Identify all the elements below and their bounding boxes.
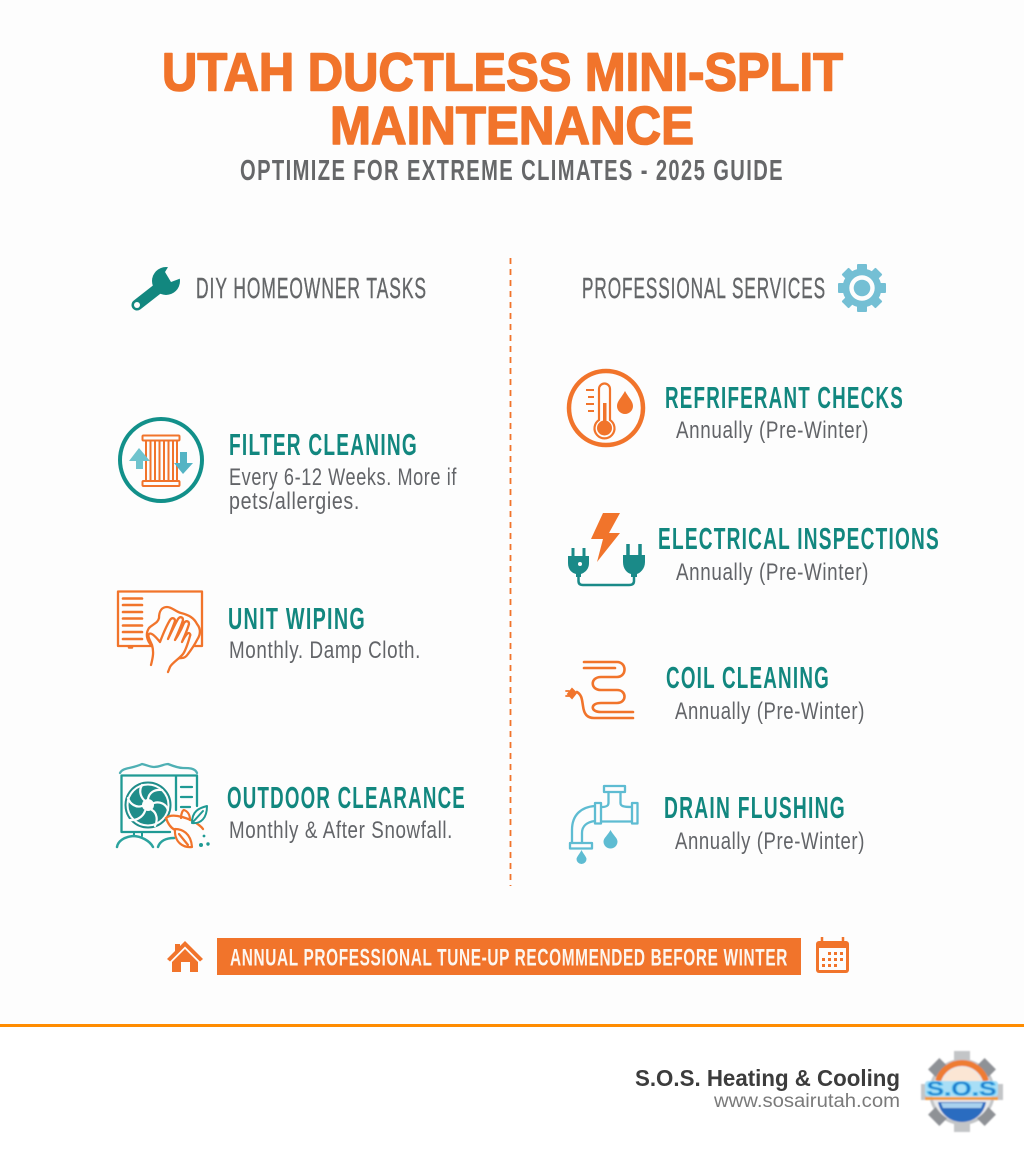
company name: S.O.S. Heating & Cooling bbox=[635, 1065, 900, 1091]
column divider bbox=[510, 258, 512, 886]
label: coil cleaning: COIL CLEANING bbox=[666, 660, 830, 695]
label: unit wiping: UNIT WIPING bbox=[228, 601, 366, 636]
header bbox=[162, 42, 843, 187]
description: refrigerant checks: Annually (Pre-Winter) bbox=[676, 417, 869, 444]
service: electrical inspections bbox=[568, 513, 940, 586]
description: filter cleaning: Every 6-12 Weeks. More if bbox=[229, 464, 457, 491]
icon: pipe and drops bbox=[570, 786, 638, 864]
title: MAINTENANCE bbox=[330, 96, 694, 156]
icon: thermometer and drop bbox=[569, 371, 643, 445]
service: drain flushing bbox=[570, 786, 865, 864]
description: outdoor clearance: Monthly & After Snowfall. bbox=[229, 817, 453, 844]
task: filter cleaning bbox=[120, 419, 457, 515]
panel: DIY homeowner tasks bbox=[117, 259, 466, 847]
description: coil cleaning: Annually (Pre-Winter) bbox=[675, 698, 865, 725]
label: filter cleaning: FILTER CLEANING bbox=[229, 427, 418, 462]
description: unit wiping: Monthly. Damp Cloth. bbox=[229, 637, 421, 664]
icon: outdoor unit with leaves bbox=[117, 764, 210, 847]
label: drain flushing: DRAIN FLUSHING bbox=[664, 790, 846, 825]
task: outdoor clearance bbox=[117, 764, 466, 847]
heading: professional services: PROFESSIONAL SERVICES bbox=[582, 273, 826, 305]
icon: heating coil bbox=[566, 662, 633, 718]
callout: annual tune-up bbox=[167, 937, 849, 975]
subtitle: OPTIMIZE FOR EXTREME CLIMATES - 2025 GUIDE bbox=[240, 155, 784, 187]
icon: house bbox=[167, 941, 203, 972]
title: UTAH DUCTLESS MINI-SPLIT bbox=[162, 42, 843, 102]
service: refrigerant checks bbox=[569, 371, 904, 445]
task: unit wiping bbox=[118, 592, 421, 672]
description: drain flushing: Annually (Pre-Winter) bbox=[675, 828, 865, 855]
footer bbox=[0, 1024, 1024, 1154]
website: www.sosairutah.com bbox=[713, 1091, 900, 1112]
description: filter cleaning bbox=[229, 464, 457, 515]
footer rule bbox=[0, 1024, 1024, 1027]
icon: hand wiping unit bbox=[118, 592, 202, 672]
label: outdoor clearance: OUTDOOR CLEARANCE bbox=[227, 780, 466, 815]
logo: S.O.S gear: S.O.S bbox=[926, 1078, 996, 1100]
icon: plugs and lightning bbox=[568, 513, 645, 585]
logo: S.O.S gear bbox=[921, 1051, 1003, 1132]
description: filter cleaning: pets/allergies. bbox=[229, 488, 360, 515]
title bbox=[162, 42, 843, 156]
heading: DIY homeowner tasks: DIY HOMEOWNER TASKS bbox=[196, 273, 427, 305]
icon: wrench bbox=[134, 259, 192, 308]
panel: professional services bbox=[566, 264, 940, 864]
icon: calendar bbox=[816, 937, 849, 973]
icon: filter bbox=[120, 419, 202, 501]
icon: gear bbox=[838, 264, 886, 312]
description: electrical inspections: Annually (Pre-Winter) bbox=[676, 559, 869, 586]
service: coil cleaning bbox=[566, 660, 865, 725]
banner bar bbox=[217, 938, 801, 975]
